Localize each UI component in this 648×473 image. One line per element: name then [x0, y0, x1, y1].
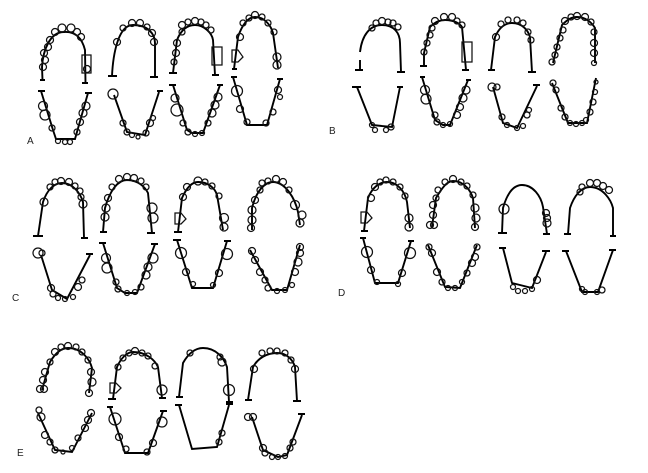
panel: B — [329, 12, 598, 137]
arch C4 lower — [248, 244, 304, 294]
arch A1 upper — [40, 24, 91, 83]
arch E3 lower — [175, 404, 233, 449]
arch E4 upper — [245, 348, 301, 401]
arch E2 lower — [107, 407, 167, 455]
arch D1 lower — [360, 238, 416, 286]
arch C1 upper — [33, 178, 88, 238]
label E: E — [17, 448, 24, 459]
arch C2 upper — [100, 174, 158, 233]
arch C2 lower — [99, 243, 158, 296]
arch B1 upper — [355, 18, 405, 72]
label B: B — [329, 126, 336, 137]
arch D1 upper — [361, 177, 413, 231]
panel: E — [17, 342, 305, 460]
arch A3 lower — [169, 85, 223, 136]
arch A4 lower — [231, 77, 283, 126]
arch B2 lower — [420, 77, 471, 128]
arch A2 lower — [108, 89, 163, 139]
arch B4 upper — [549, 12, 598, 66]
panel: C — [12, 174, 306, 304]
arch D2 upper — [426, 176, 480, 230]
arch E2 upper — [108, 348, 167, 399]
arch E1 upper — [36, 342, 96, 396]
panel: A — [27, 12, 283, 147]
arch B3 lower — [488, 83, 540, 130]
arch C1 lower — [33, 248, 93, 302]
arch C3 lower — [173, 240, 232, 288]
arch D4 upper — [564, 180, 616, 236]
arch B1 lower — [352, 87, 403, 132]
panel: D — [338, 176, 616, 299]
arch A2 upper — [108, 20, 158, 77]
arch A1 lower — [38, 91, 92, 144]
arch D2 lower — [426, 244, 480, 290]
arch E3 upper — [176, 348, 234, 402]
label D: D — [338, 288, 345, 299]
arch E1 lower — [36, 407, 94, 454]
arch C3 upper — [174, 177, 228, 232]
arch D3 lower — [499, 248, 550, 294]
arch A3 upper — [169, 18, 222, 75]
arch C4 upper — [248, 176, 306, 232]
arch D3 upper — [498, 185, 551, 234]
label C: C — [12, 293, 19, 304]
arch B4 lower — [550, 78, 598, 126]
arch E4 lower — [244, 414, 305, 460]
arch D4 lower — [562, 250, 616, 294]
arch B3 upper — [488, 17, 536, 72]
arch A4 upper — [232, 12, 281, 69]
label A: A — [27, 136, 34, 147]
arch B2 upper — [420, 14, 472, 70]
